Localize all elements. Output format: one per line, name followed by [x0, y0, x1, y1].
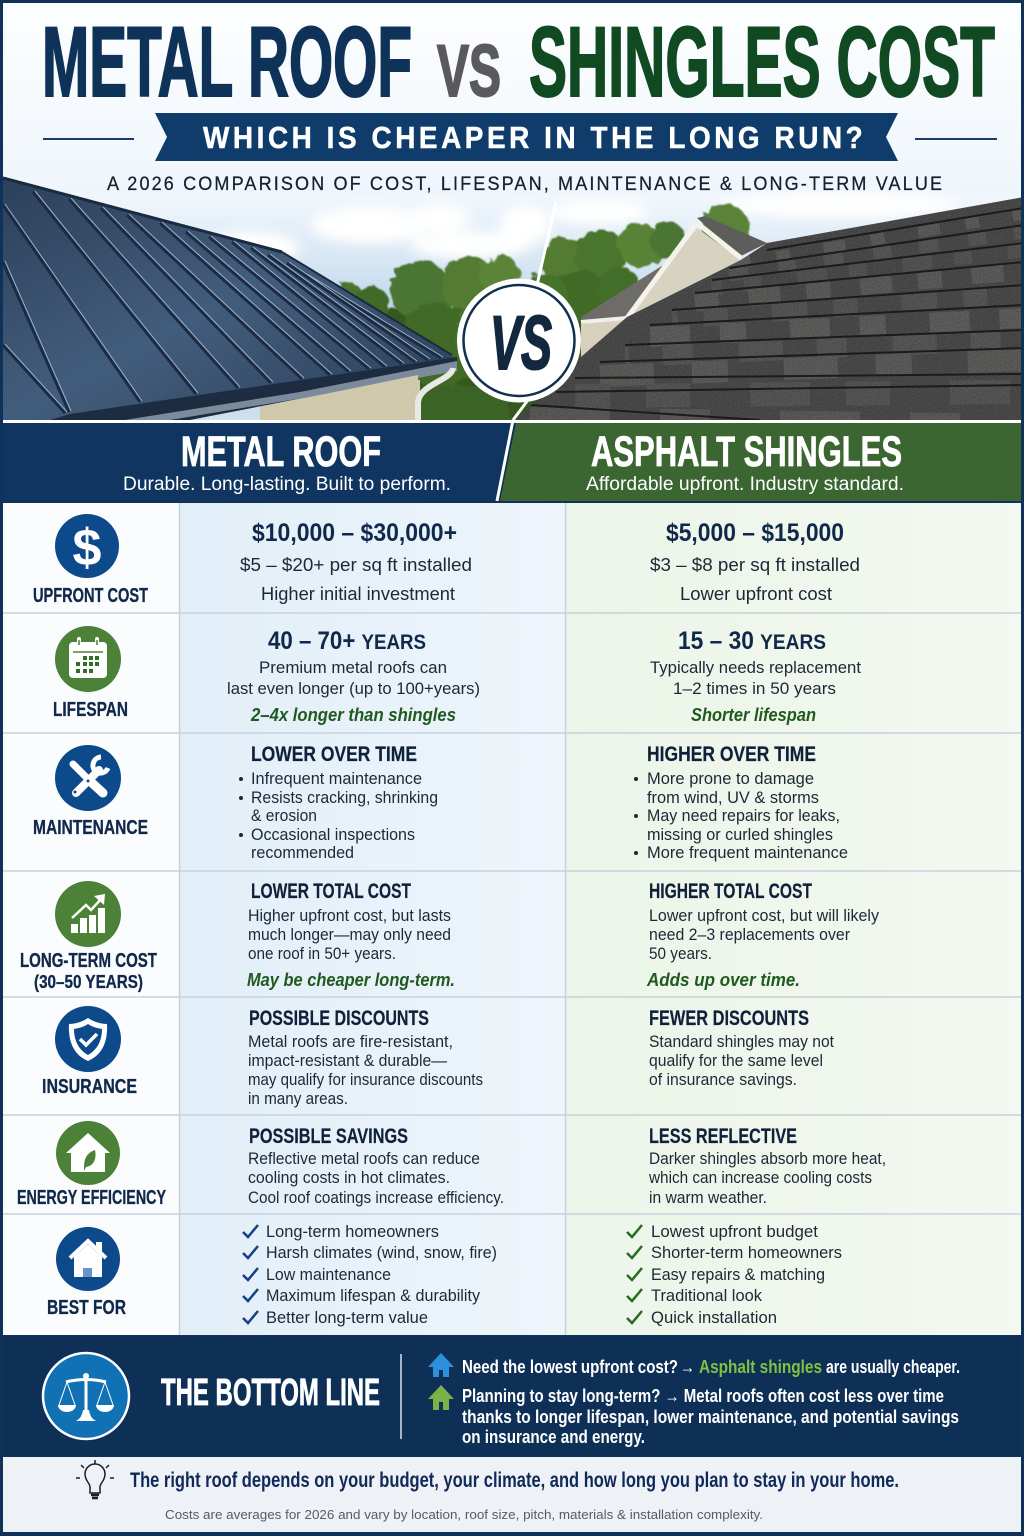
row: lifespan [53, 626, 861, 725]
shingle long-term: 50 years. [649, 945, 712, 963]
shingle maintenance [634, 743, 848, 862]
column headers [3, 420, 1021, 501]
icon: growth chart [55, 881, 121, 947]
row: upfront cost [33, 514, 860, 607]
metal maintenance: recommended [251, 844, 354, 862]
upfront line: Asphalt shingles [699, 1357, 822, 1377]
metal lifespan [227, 627, 480, 725]
header: metal roof: Durable. Long-lasting. Built to perform. [123, 474, 451, 495]
metal energy: POSSIBLE SAVINGS [249, 1125, 408, 1148]
gutter [50, 357, 457, 420]
shingle maintenance: HIGHER OVER TIME [647, 743, 816, 766]
subtitle ribbon [43, 113, 997, 161]
trees [338, 204, 749, 430]
header: asphalt shingles [500, 423, 1021, 501]
metal maintenance: & erosion [251, 807, 317, 825]
row: energy efficiency [17, 1121, 886, 1209]
icon: scales [43, 1353, 129, 1439]
comparison table background [3, 501, 1021, 1335]
shingle energy: in warm weather. [649, 1189, 767, 1207]
header: metal roof: METAL ROOF [181, 428, 381, 476]
icon: house with leaf [56, 1121, 120, 1185]
row: long-term cost [20, 880, 880, 992]
metal best-for list: Harsh climates (wind, snow, fire) [266, 1244, 497, 1262]
shingle insurance [649, 1007, 834, 1089]
metal long-term: May be cheaper long-term. [247, 970, 455, 990]
shingle maintenance: More prone to damage [647, 770, 814, 788]
metal insurance: in many areas. [248, 1090, 348, 1108]
icon: wrench and screwdriver [55, 745, 121, 811]
shingle best-for list: Quick installation [651, 1309, 777, 1327]
label: UPFRONT COST [33, 585, 148, 607]
metal insurance [248, 1007, 483, 1108]
label: INSURANCE [42, 1076, 137, 1098]
shingle cost: Lower upfront cost [680, 583, 832, 604]
label: ENERGY EFFICIENCY [17, 1187, 166, 1209]
shingle cost: $3 – $8 per sq ft installed [650, 554, 860, 575]
shingle energy: Darker shingles absorb more heat, [649, 1150, 886, 1168]
shingle best-for list: Easy repairs & matching [651, 1266, 825, 1284]
metal roof [3, 178, 457, 420]
shingle best-for list [627, 1223, 842, 1327]
shingle roof [516, 197, 1024, 425]
row: maintenance [33, 743, 848, 862]
metal energy: cooling costs in hot climates. [248, 1169, 450, 1187]
shingle long-term [646, 880, 880, 990]
upfront line [462, 1357, 960, 1377]
icon: calendar [55, 626, 121, 692]
heading: THE BOTTOM LINE [161, 1372, 380, 1414]
metal lifespan: last even longer (up to 100+years) [227, 680, 480, 698]
long-term text [462, 1386, 959, 1447]
label: BEST FOR [47, 1297, 126, 1319]
shingle long-term: Lower upfront cost, but will likely [649, 907, 880, 925]
shingle best-for list: Traditional look [651, 1287, 763, 1305]
label: LONG-TERM COST [20, 950, 157, 972]
row: insurance [42, 1006, 834, 1108]
shingle long-term: need 2–3 replacements over [649, 926, 850, 944]
icon: blue house [428, 1353, 454, 1377]
shingle best-for list: Lowest upfront budget [651, 1223, 818, 1241]
shingle energy [648, 1125, 886, 1207]
label: LIFESPAN [53, 699, 128, 721]
panel: footer [3, 1457, 1021, 1532]
shingle maintenance: May need repairs for leaks, [647, 807, 840, 825]
icon: dollar [55, 514, 119, 578]
metal best-for list: Long-term homeowners [266, 1223, 439, 1241]
metal best-for list: Maximum lifespan & durability [266, 1287, 481, 1305]
label: MAINTENANCE [33, 817, 148, 839]
metal long-term: one roof in 50+ years. [248, 945, 396, 963]
VS badge: VS [490, 301, 552, 386]
subtitle ribbon: WHICH IS CHEAPER IN THE LONG RUN? [203, 121, 863, 155]
title: METAL ROOF [42, 6, 412, 117]
header: asphalt shingles: Affordable upfront. Industry standard. [586, 474, 904, 495]
metal maintenance: Occasional inspections [251, 826, 415, 844]
icon: shield [55, 1006, 121, 1072]
long-term text: thanks to longer lifespan, lower maintenance, and potential savings [462, 1407, 959, 1427]
shingle long-term: HIGHER TOTAL COST [649, 880, 812, 903]
metal insurance: POSSIBLE DISCOUNTS [249, 1007, 429, 1030]
metal maintenance: Infrequent maintenance [251, 770, 422, 788]
shingle best-for list: Shorter-term homeowners [651, 1244, 842, 1262]
shingle insurance: of insurance savings. [649, 1071, 797, 1089]
long-term text: on insurance and energy. [462, 1427, 645, 1447]
upfront line: → [680, 1357, 695, 1377]
metal cost: Higher initial investment [261, 583, 455, 604]
long-term text: Planning to stay long-term? → Metal roofs often cost less over time [462, 1386, 944, 1406]
shingle cost [650, 519, 860, 604]
hero photo comparison [3, 178, 1024, 430]
shingle cost: $5,000 – $15,000 [666, 519, 844, 547]
metal lifespan: 2–4x longer than shingles [250, 705, 456, 725]
metal long-term [247, 880, 455, 990]
row: best for [47, 1223, 842, 1327]
metal maintenance: Resists cracking, shrinking [251, 789, 438, 807]
shingle insurance: qualify for the same level [649, 1052, 823, 1070]
metal long-term: much longer—may only need [248, 926, 451, 944]
metal long-term: LOWER TOTAL COST [251, 880, 411, 903]
panel: the bottom line [3, 1336, 1021, 1456]
metal cost: $10,000 – $30,000+ [252, 519, 457, 547]
metal lifespan: Premium metal roofs can [259, 659, 447, 677]
metal lifespan: 40 – 70+ YEARS [268, 627, 426, 655]
metal energy: Reflective metal roofs can reduce [248, 1150, 480, 1168]
shingle insurance: Standard shingles may not [649, 1033, 834, 1051]
icon: green house [428, 1385, 454, 1410]
label: (30–50 YEARS) [34, 972, 143, 992]
metal best-for list: Low maintenance [266, 1266, 391, 1284]
title [42, 6, 995, 117]
header: asphalt shingles: ASPHALT SHINGLES [591, 428, 902, 476]
metal best-for list: Better long-term value [266, 1309, 428, 1327]
metal insurance: Metal roofs are fire-resistant, [248, 1033, 453, 1051]
shingle maintenance: missing or curled shingles [647, 826, 833, 844]
header: metal roof [3, 423, 510, 501]
divider line in photo [513, 202, 556, 420]
metal maintenance: LOWER OVER TIME [251, 743, 417, 766]
shingle insurance: FEWER DISCOUNTS [649, 1007, 809, 1030]
metal insurance: may qualify for insurance discounts [248, 1071, 483, 1089]
metal energy: Cool roof coatings increase efficiency. [248, 1189, 504, 1207]
shingle lifespan [650, 627, 861, 725]
shingle energy: LESS REFLECTIVE [649, 1125, 797, 1148]
metal best-for list [243, 1223, 497, 1327]
VS badge [457, 278, 581, 402]
shingle lifespan: Typically needs replacement [650, 659, 861, 677]
upfront line: are usually cheaper. [826, 1357, 960, 1377]
shingle lifespan: 15 – 30 YEARS [678, 627, 826, 655]
tagline: A 2026 COMPARISON OF COST, LIFESPAN, MAINTENANCE & LONG-TERM VALUE [107, 173, 942, 194]
shingle lifespan: Shorter lifespan [691, 705, 816, 725]
shingle maintenance: from wind, UV & storms [647, 789, 819, 807]
metal energy [248, 1125, 504, 1207]
shingle maintenance: More frequent maintenance [647, 844, 848, 862]
metal maintenance [239, 743, 438, 862]
icon: dollar: $ [73, 519, 102, 577]
disclaimer: Costs are averages for 2026 and vary by location, roof size, pitch, materials & installation complexity. [165, 1507, 763, 1522]
icon: house [56, 1227, 120, 1291]
metal cost [240, 519, 472, 604]
label [20, 950, 157, 992]
shingle lifespan: 1–2 times in 50 years [673, 680, 836, 698]
icon: light bulb [76, 1460, 114, 1498]
metal insurance: impact-resistant & durable— [248, 1052, 447, 1070]
upfront line: Need the lowest upfront cost? [462, 1357, 678, 1377]
shingle energy: which can increase cooling costs [648, 1169, 872, 1187]
metal long-term: Higher upfront cost, but lasts [248, 907, 451, 925]
title: VS [437, 31, 501, 112]
metal cost: $5 – $20+ per sq ft installed [240, 554, 472, 575]
shingle long-term: Adds up over time. [646, 970, 800, 990]
